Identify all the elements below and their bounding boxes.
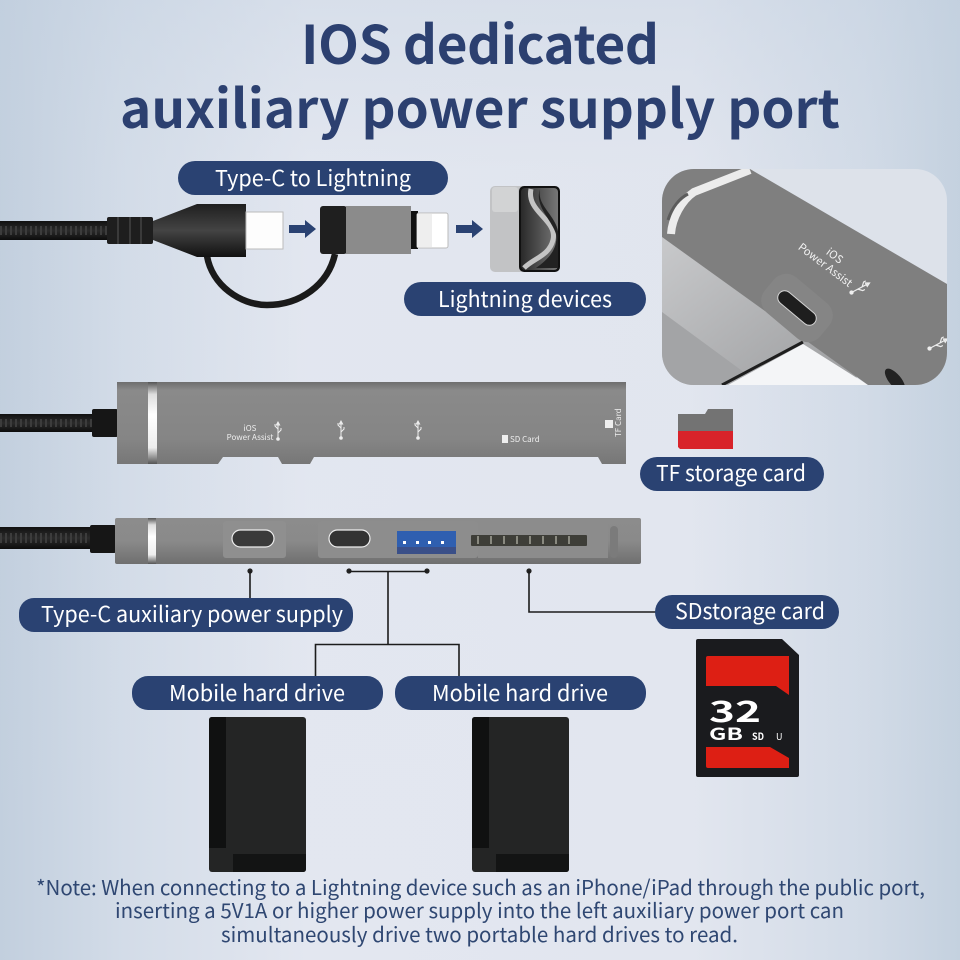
text: iOS Power Assist: Power Assist <box>795 239 856 291</box>
connector: SD card <box>526 568 656 612</box>
icon: USB ports symbols <box>275 421 421 441</box>
label: Mobile hard drive 1: Mobile hard drive <box>169 676 345 708</box>
text: iOS Power Assist <box>227 423 273 443</box>
icon: iPhone <box>490 186 560 272</box>
label: Mobile hard drive 2 <box>395 676 646 710</box>
icon: USB symbol cropped <box>927 336 947 351</box>
icon: SD card 32GB: 32 <box>709 689 761 731</box>
icon: SD card 32GB: U <box>776 730 782 743</box>
note text: inserting a 5V1A or higher power supply into the left auxiliary power port can <box>115 894 844 924</box>
port: SD slot <box>471 535 587 546</box>
hub: ports view <box>0 518 641 564</box>
text: iOS Power Assist: iOS <box>823 244 847 268</box>
text: TF Card <box>605 408 624 437</box>
title <box>120 4 840 144</box>
note text: simultaneously drive two portable hard drives to read. <box>221 918 738 948</box>
icon: SD card 32GB: SD <box>752 728 764 743</box>
text: TF Card: TF Card <box>613 408 624 437</box>
icon: SD card 32GB <box>696 639 799 777</box>
port: Type-C 1 <box>232 530 274 547</box>
label: TF storage card: TF storage card <box>656 456 806 488</box>
icon: hard drive 1 <box>209 717 306 872</box>
title: auxiliary power supply port <box>120 68 840 144</box>
label: Mobile hard drive 1 <box>132 676 383 710</box>
label: Type-C to Lightning: Type-C to Lightning <box>215 161 412 193</box>
port: Type-C close-up <box>766 290 817 342</box>
port: Type-C 2 <box>329 530 370 547</box>
inset photo: iOS power assist port close-up <box>662 169 949 395</box>
icon: USB symbol <box>849 280 870 295</box>
text: iOS Power Assist: Power Assist <box>227 432 273 443</box>
icon: Type-C to Lightning cable <box>0 204 448 305</box>
port: USB-A <box>397 531 456 554</box>
arrow: adapter to device <box>456 220 483 238</box>
connector: Type-C auxiliary <box>247 568 253 598</box>
label: SDstorage card: SDstorage card <box>675 594 825 626</box>
hub: top view <box>0 382 626 464</box>
label: Type-C auxiliary power supply: Type-C auxiliary power supply <box>41 597 344 629</box>
icon: hard drive 2 <box>472 717 569 872</box>
note text: *Note: When connecting to a Lightning device such as an iPhone/iPad through the public port, <box>36 871 925 901</box>
label: Mobile hard drive 2: Mobile hard drive <box>432 676 608 708</box>
label: Lightning devices: Lightning devices <box>438 282 612 314</box>
note text <box>36 871 925 948</box>
icon: TF card <box>678 409 733 449</box>
title: IOS dedicated <box>301 4 659 80</box>
icon: SD card 32GB: GB <box>709 720 743 745</box>
arrow: cable to adapter <box>289 220 316 238</box>
connector: hard drive ports <box>316 568 459 676</box>
text: SD Card: SD Card <box>510 434 540 445</box>
label: Lightning devices <box>404 282 646 316</box>
text: iOS Power Assist: iOS <box>244 423 257 434</box>
label: Type-C to Lightning <box>178 161 448 195</box>
